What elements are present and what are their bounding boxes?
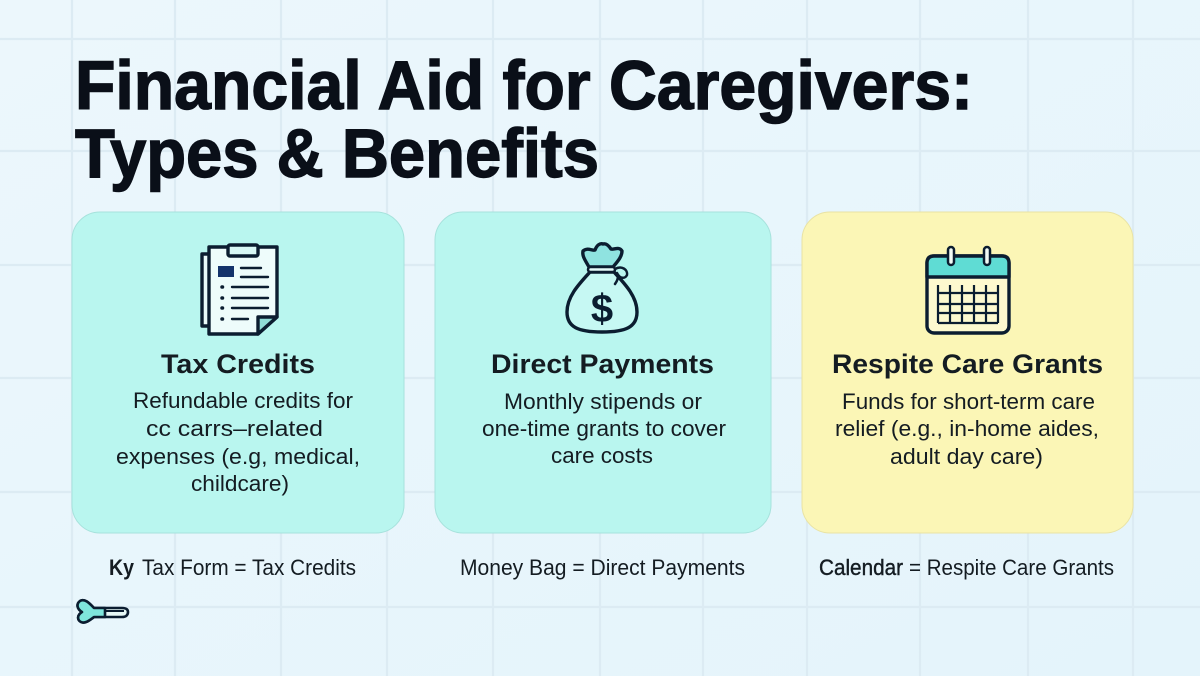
text block: direct payments description: care costs	[551, 443, 653, 468]
key: tax form: Ky	[109, 555, 135, 580]
heading: direct payments: Direct Payments	[491, 349, 714, 379]
text block: tax credits description: Refundable credits for	[133, 388, 354, 413]
icon: dollar sign: $	[591, 287, 613, 331]
text block: tax credits description: childcare)	[191, 471, 289, 496]
key: calendar	[819, 555, 1114, 580]
icon: key glyph	[78, 600, 128, 623]
text block: direct payments description: one-time grants to cover	[482, 416, 726, 441]
key: tax form: Tax Form = Tax Credits	[142, 555, 356, 580]
text block: respite care description: Funds for short-term care	[842, 389, 1095, 414]
text block: direct payments description: Monthly stipends or	[504, 389, 703, 414]
key: calendar: Calendar	[819, 555, 903, 580]
panel: respite care grants	[802, 212, 1133, 533]
text block: tax credits description: expenses (e.g, medical,	[116, 444, 360, 469]
title	[75, 47, 973, 192]
text block: respite care description: relief (e.g., in-home aides,	[835, 416, 1099, 441]
icon: calendar	[927, 247, 1009, 333]
title: Types & Benefits	[75, 115, 599, 192]
key: money bag: Money Bag = Direct Payments	[460, 555, 745, 580]
panel: tax credits	[72, 212, 404, 533]
text block: tax credits description	[116, 388, 360, 496]
text block: respite care description	[835, 389, 1099, 469]
panel: direct payments	[435, 212, 771, 533]
text block: direct payments description	[482, 389, 726, 468]
title: Financial Aid for Caregivers:	[75, 47, 973, 124]
key: calendar: = Respite Care Grants	[909, 555, 1114, 580]
text block: respite care description: adult day care)	[890, 444, 1043, 469]
heading: tax credits: Tax Credits	[161, 349, 315, 379]
icon: tax form	[202, 245, 277, 334]
heading: respite care grants: Respite Care Grants	[832, 349, 1103, 379]
text block: tax credits description: cc carrs–related	[146, 416, 323, 441]
icon: money bag	[567, 244, 637, 332]
